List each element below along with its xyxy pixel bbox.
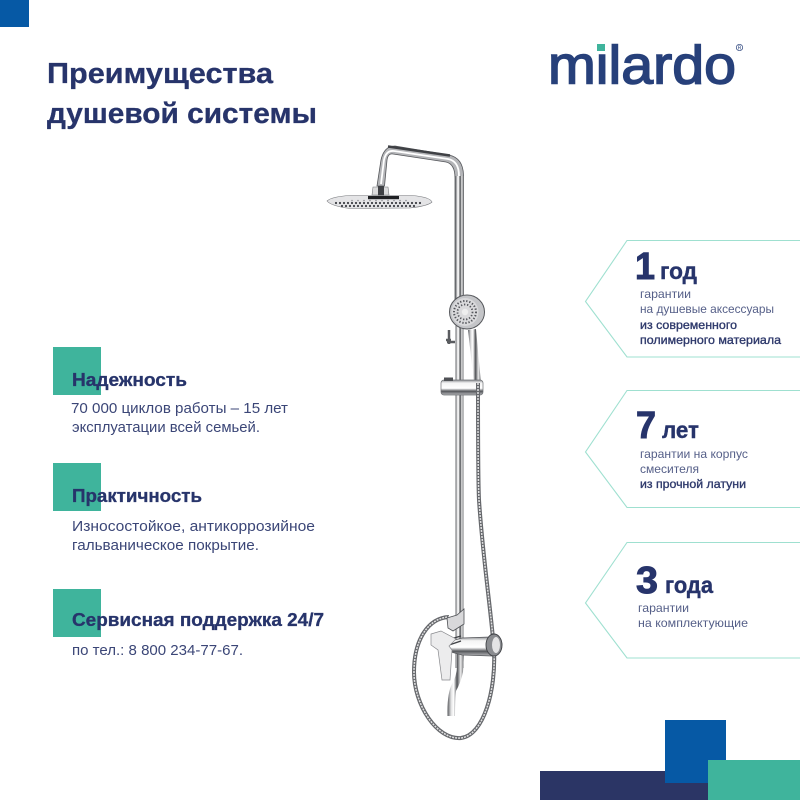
text: reliability: эксплуатации всей семьей. [72, 419, 260, 436]
panel: 1 year warranty [586, 240, 800, 357]
text: 3 years: на комплектующие [638, 616, 748, 630]
text: 1 year: на душевые аксессуары [640, 302, 774, 316]
text: 1 year: полимерного материала [640, 333, 781, 347]
text: support: по тел.: 8 800 234-77-67. [72, 642, 243, 659]
text: 7 years: из прочной латуни [640, 477, 746, 491]
text: reliability: 70 000 циклов работы – 15 лет [71, 400, 288, 417]
diverter knob [446, 330, 455, 344]
panel: service support [53, 589, 324, 659]
title: Преимущества [47, 58, 274, 90]
mixer body [447, 637, 502, 656]
hand shower head [450, 295, 484, 329]
number: 1 year [635, 246, 697, 288]
hand shower handle [468, 329, 481, 383]
text: 7 years: смесителя [640, 462, 699, 476]
spout [447, 652, 464, 716]
title [47, 58, 317, 130]
text: 7 years: гарантии на корпус [640, 447, 748, 461]
text: 3 years: гарантии [638, 601, 689, 615]
accent square: support [53, 589, 101, 637]
main rod [456, 298, 464, 668]
hose [414, 383, 494, 738]
heading: support: Сервисная поддержка 24/7 [72, 610, 324, 630]
slider clamp [441, 380, 483, 395]
text: 1 year [640, 287, 781, 347]
corner square: top left [0, 0, 29, 27]
number: 7 years [636, 405, 699, 447]
pentagon outline [586, 542, 800, 658]
pentagon outline [586, 390, 800, 508]
overhead pipe arm [377, 146, 464, 300]
illustration: shower system [327, 146, 502, 738]
text: 1 year: из современного [640, 318, 737, 332]
number: 1 year: 1 [635, 246, 655, 288]
text: practicality [72, 518, 315, 554]
number: 3 years: года [665, 572, 713, 598]
text: practicality: гальваническое покрытие. [72, 537, 259, 554]
number: 1 year: год [660, 258, 697, 284]
accent square: reliability [53, 347, 101, 395]
text: practicality: Износостойкое, антикоррозийное [72, 518, 315, 535]
number: 3 years: 3 [636, 560, 658, 602]
logo: milardo: milardo [548, 36, 736, 96]
text: reliability [71, 400, 288, 436]
text: 1 year: гарантии [640, 287, 691, 301]
panel: 7 years warranty [586, 390, 800, 508]
panel: 3 years warranty [586, 542, 800, 658]
text: 7 years [640, 447, 748, 491]
corner blocks: bottom right [540, 720, 800, 800]
panel: reliability [53, 347, 288, 436]
accent square: practicality [53, 463, 101, 511]
vertical upper rod [456, 176, 464, 301]
mixer lever [431, 631, 456, 680]
title: душевой системы [47, 98, 317, 130]
number: 7 years: лет [662, 417, 699, 443]
pentagon outline [586, 240, 800, 357]
heading: practicality: Практичность [72, 486, 202, 506]
heading: reliability: Надежность [72, 370, 187, 390]
wall connector [447, 609, 464, 631]
number: 3 years [636, 560, 713, 602]
logo: milardo: R [738, 46, 742, 52]
rain head collar [372, 187, 389, 195]
rain shower head [327, 196, 432, 208]
panel: practicality [53, 463, 315, 554]
number: 7 years: 7 [636, 405, 656, 447]
text: 3 years [638, 601, 748, 630]
